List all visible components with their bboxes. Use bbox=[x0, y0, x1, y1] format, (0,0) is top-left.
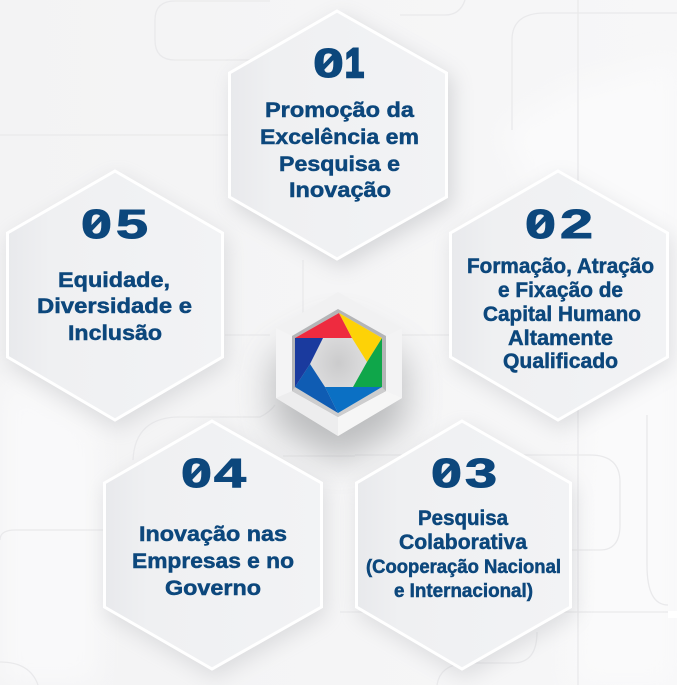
heading: formação, atração e fixação de capital humano altamente qualificado: Capital Humano bbox=[483, 303, 641, 326]
panel: hexagon 01 promoção da excelência bbox=[230, 11, 453, 268]
panel: hexagon 03 pesquisa colaborativa bbox=[356, 421, 575, 678]
number 03: 0 bbox=[431, 450, 462, 496]
heading: formação, atração e fixação de capital humano altamente qualificado: Altamente bbox=[508, 327, 613, 350]
heading: pesquisa colaborativa (cooperação nacional e internacional): Colaborativa bbox=[399, 531, 527, 554]
number 04: 0 bbox=[181, 450, 212, 496]
number 04: 4 bbox=[214, 450, 246, 496]
heading: pesquisa colaborativa (cooperação nacional e internacional) bbox=[366, 507, 561, 602]
heading: promoção da excelência em pesquisa e inovação: Pesquisa e bbox=[279, 153, 400, 176]
heading: inovação nas empresas e no governo bbox=[132, 523, 294, 600]
heading: pesquisa colaborativa (cooperação nacional e internacional): (Cooperação Nacional bbox=[366, 557, 561, 578]
number 01 bbox=[313, 40, 364, 86]
number 03 bbox=[431, 450, 497, 496]
heading: pesquisa colaborativa (cooperação nacional e internacional): e Internacional) bbox=[394, 581, 533, 602]
heading: equidade, diversidade e inclusão bbox=[37, 269, 192, 345]
panel: hexagon 02 formação bbox=[450, 171, 672, 429]
number 05: 5 bbox=[116, 201, 148, 247]
heading: promoção da excelência em pesquisa e inovação bbox=[260, 99, 419, 202]
heading: equidade, diversidade e inclusão: Inclusão bbox=[68, 322, 162, 345]
heading: formação, atração e fixação de capital humano altamente qualificado: Formação, Atração bbox=[467, 255, 654, 278]
number 02 bbox=[525, 201, 593, 247]
heading: formação, atração e fixação de capital humano altamente qualificado bbox=[467, 255, 654, 373]
heading: formação, atração e fixação de capital humano altamente qualificado: e Fixação de bbox=[498, 279, 623, 302]
heading: equidade, diversidade e inclusão: Equidade, bbox=[58, 269, 170, 292]
icon: central hexagon logo bbox=[276, 292, 402, 436]
number 01: 1 bbox=[345, 40, 364, 86]
logo coloured aperture bbox=[295, 313, 382, 413]
panel: hexagon 05 equidade bbox=[8, 171, 227, 429]
heading: promoção da excelência em pesquisa e inovação: Inovação bbox=[289, 179, 391, 202]
heading: promoção da excelência em pesquisa e inovação: Excelência em bbox=[260, 126, 419, 149]
number 04 bbox=[181, 450, 246, 496]
shadow below central logo bbox=[273, 325, 405, 462]
heading: inovação nas empresas e no governo: Empresas e no bbox=[132, 550, 294, 573]
heading: inovação nas empresas e no governo: Governo bbox=[165, 577, 261, 600]
number 05: 0 bbox=[81, 201, 112, 247]
panel: hexagon 04 inovação nas empresas bbox=[104, 421, 326, 678]
heading: inovação nas empresas e no governo: Inovação nas bbox=[139, 523, 287, 546]
number 02: 2 bbox=[560, 201, 593, 247]
logo bevel frame bbox=[276, 292, 402, 436]
number 02: 0 bbox=[525, 201, 556, 247]
number 05 bbox=[81, 201, 148, 247]
heading: pesquisa colaborativa (cooperação nacional e internacional): Pesquisa bbox=[418, 507, 508, 530]
heading: equidade, diversidade e inclusão: Diversidade e bbox=[37, 295, 192, 318]
heading: formação, atração e fixação de capital humano altamente qualificado: Qualificado bbox=[503, 350, 618, 373]
number 03: 3 bbox=[465, 450, 497, 496]
number 01: 0 bbox=[313, 40, 344, 86]
heading: promoção da excelência em pesquisa e inovação: Promoção da bbox=[265, 99, 414, 122]
